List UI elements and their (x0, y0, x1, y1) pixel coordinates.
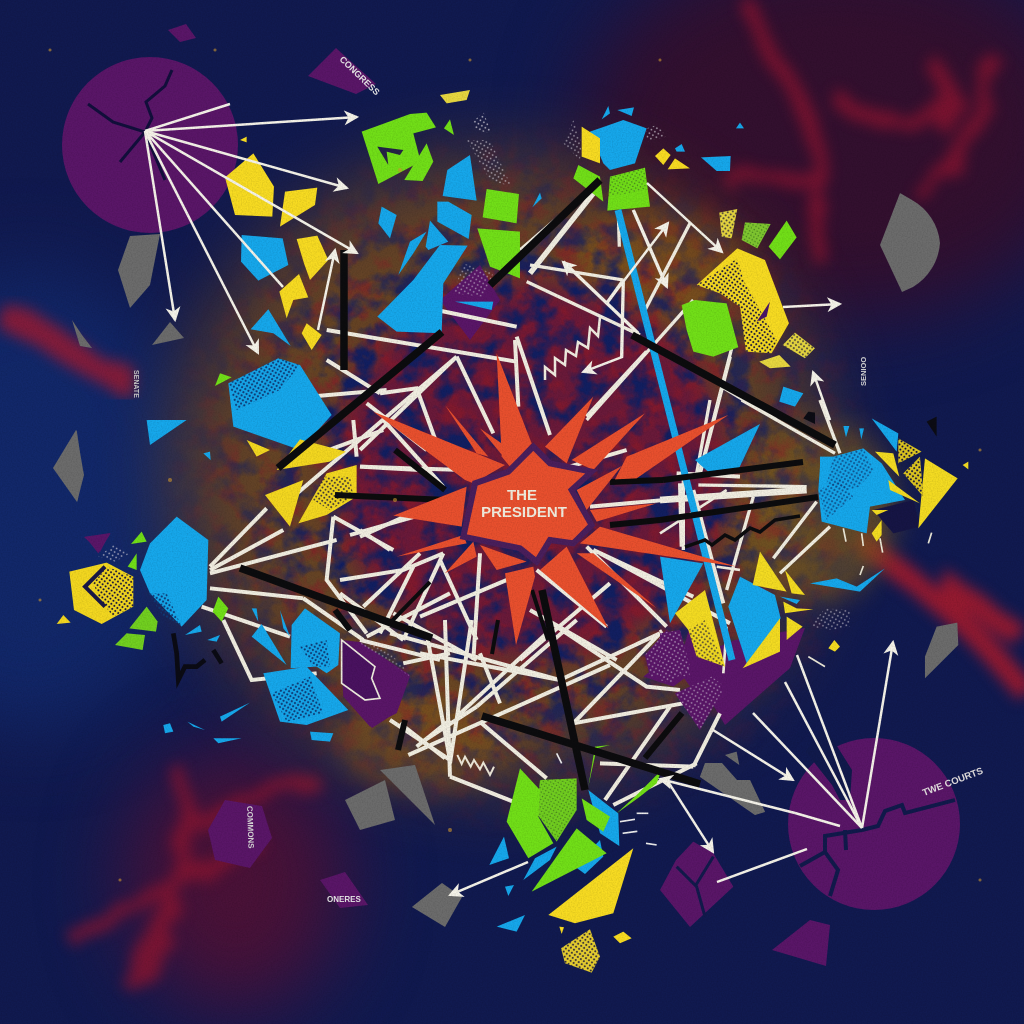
other arrows (563, 183, 840, 420)
halftone patches: upper left (228, 90, 512, 410)
label: bottom: ONERES (327, 895, 361, 904)
label: bottom left: COMMONS (245, 806, 256, 849)
label: the courts: TWE COURTS (921, 766, 985, 799)
shards: left cluster (53, 420, 410, 743)
grey fragments (53, 193, 958, 927)
purple circle: the courts (788, 730, 985, 910)
shards: bottom cluster (412, 630, 765, 973)
label: congress: CONGRESS (338, 54, 382, 97)
shards: right cluster (660, 412, 968, 698)
green shards: upper left (215, 113, 520, 386)
white network lines: upper right (520, 190, 777, 420)
white network lines: left and lower (202, 420, 450, 760)
label: the president: THE (507, 487, 537, 504)
white lines: right hub (660, 400, 840, 673)
label: left: SENATE (132, 370, 139, 398)
shards: upper right (532, 106, 815, 407)
blue diagonal line (618, 210, 732, 660)
confetti dots (38, 48, 982, 882)
zigzag line (545, 317, 600, 380)
label: the president second line: PRESIDENT (481, 504, 567, 521)
purple fragments (84, 24, 830, 966)
black lines (240, 180, 835, 790)
arrows from top left circle (145, 104, 357, 353)
blue shards: upper left (228, 155, 493, 450)
label: agency right: SENIOO (859, 357, 868, 386)
starburst: the president (373, 353, 737, 645)
purple circle: top left (62, 57, 238, 233)
white network lines: center (293, 310, 740, 660)
yellow shards: upper left (225, 137, 328, 350)
white network lines: bottom (390, 620, 720, 805)
arrows from the courts (450, 642, 893, 895)
